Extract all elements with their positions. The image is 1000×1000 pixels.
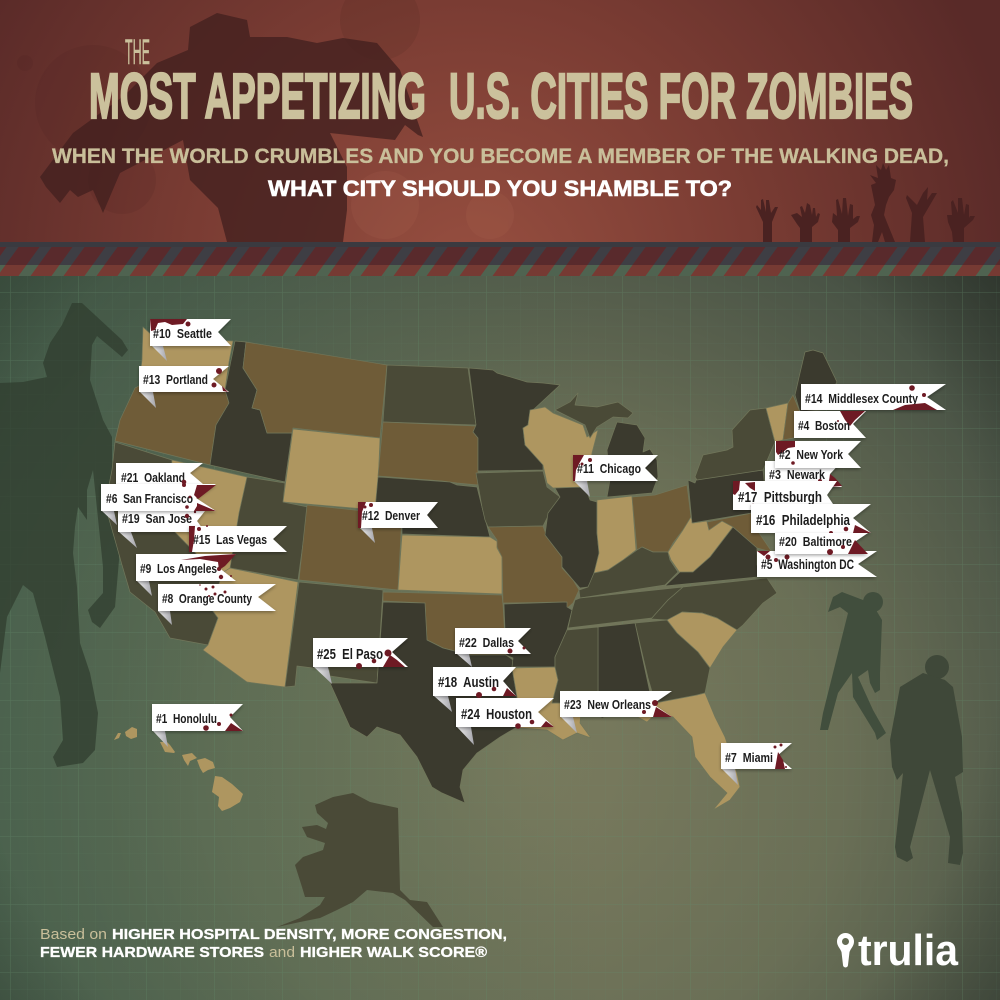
- state: Arizona: [203, 568, 298, 687]
- state: West Virginia: [668, 517, 733, 573]
- header panel: [0, 0, 1000, 242]
- flag: #8 Orange County: [158, 584, 276, 625]
- state: Oregon: [115, 380, 229, 465]
- flag: #19 San Jose: #19 San Jose: [122, 511, 192, 526]
- flag: #17 Pittsburgh: [733, 481, 837, 510]
- state: New Mexico: [285, 582, 383, 687]
- flag: #24 Houston: [456, 698, 554, 745]
- state: North Dakota: [383, 365, 476, 425]
- state: Colorado: [299, 505, 402, 590]
- state: South Dakota: [378, 422, 478, 485]
- map background panel: [0, 242, 1000, 1000]
- state: Mississippi: [552, 627, 598, 715]
- hazard stripe band: [0, 242, 1000, 276]
- flag: #22 Dallas: [455, 628, 531, 667]
- flag: #20 Baltimore: #20 Baltimore: [779, 534, 852, 549]
- flag: #16 Philadelphia: [751, 504, 871, 535]
- flag: #24 Houston: #24 Houston: [461, 707, 532, 723]
- state: Wisconsin: [523, 407, 598, 488]
- flag: #3 Newark: [765, 461, 842, 489]
- flag: #14 Middlesex County: #14 Middlesex County: [805, 391, 919, 406]
- flag: #10 Seattle: #10 Seattle: [153, 326, 212, 341]
- state: Utah: [230, 477, 308, 580]
- state: Louisiana: [512, 667, 591, 740]
- flag: #15 Las Vegas: [189, 525, 287, 552]
- state: Missouri: [488, 526, 579, 610]
- flag: #4 Boston: [794, 411, 866, 438]
- flag: #17 Pittsburgh: #17 Pittsburgh: [738, 490, 822, 506]
- state: Minnesota: [469, 368, 560, 471]
- state: Virginia: [665, 527, 778, 586]
- state: Nevada: [168, 460, 247, 590]
- flag: #21 Oakland: [116, 463, 203, 485]
- state: South Carolina: [667, 612, 737, 668]
- trulia logo: [837, 926, 958, 975]
- state: Kansas: [398, 535, 502, 594]
- flag: #9 Los Angeles: #9 Los Angeles: [140, 561, 217, 576]
- flag: #23 New Orleans: [560, 691, 672, 733]
- flag: #21 Oakland: #21 Oakland: [121, 470, 185, 485]
- US state map: [105, 327, 837, 927]
- zombie hands: header right: [756, 163, 975, 242]
- state: North Carolina: [651, 578, 777, 630]
- state: Montana: [243, 342, 387, 438]
- wordmark: trulia: [858, 926, 958, 975]
- state: Iowa: [476, 471, 560, 527]
- state: Michigan upper: [555, 393, 633, 438]
- state: Alabama: [598, 623, 652, 718]
- flag: #16 Philadelphia: #16 Philadelphia: [756, 513, 851, 529]
- state: Hawaii: [114, 727, 243, 811]
- flag: #6 San Francisco: [101, 483, 216, 525]
- state: Wyoming: [283, 429, 380, 510]
- state: Illinois: [545, 487, 599, 588]
- state: Maryland: [707, 513, 772, 552]
- flag: #20 Baltimore: [775, 533, 868, 555]
- flag: #4 Boston: #4 Boston: [798, 418, 850, 433]
- flag: #25 El Paso: [313, 638, 408, 684]
- flag: #19 San Jose: [118, 511, 205, 548]
- flag: #11 Chicago: [573, 455, 658, 497]
- flag: #15 Las Vegas: #15 Las Vegas: [193, 532, 267, 547]
- flag: #7 Miami: [721, 743, 792, 785]
- flag: #1 Honolulu: [152, 704, 243, 747]
- subtitle line 1: WHEN THE WORLD CRUMBLES AND YOU BECOME A MEMBER OF THE WALKING DEAD,: [52, 145, 949, 168]
- state: New Hampshire: [783, 395, 800, 440]
- zombie silhouette: left: [0, 303, 128, 767]
- state: Georgia: [635, 620, 710, 703]
- flag: #6 San Francisco: #6 San Francisco: [106, 491, 193, 506]
- flag: #18 Austin: [433, 667, 516, 712]
- flag: #5 Washington DC: #5 Washington DC: [761, 557, 854, 572]
- flag: #11 Chicago: #11 Chicago: [577, 461, 641, 476]
- flag: #8 Orange County: #8 Orange County: [162, 591, 253, 606]
- flag: #12 Denver: [358, 502, 438, 543]
- methodology note: and: [269, 944, 295, 961]
- flag: #13 Portland: #13 Portland: [143, 372, 208, 387]
- flag: #1 Honolulu: #1 Honolulu: [156, 711, 217, 726]
- flag: #18 Austin: #18 Austin: [438, 675, 499, 691]
- flag: #2 New York: [775, 441, 861, 468]
- flag: #10 Seattle: [150, 319, 231, 361]
- title: THE: [125, 33, 150, 72]
- state: Texas: [330, 602, 517, 803]
- flag: #5 Washington DC: [757, 551, 877, 577]
- state: Vermont: [766, 403, 788, 442]
- state: California: [105, 442, 223, 645]
- flag: #2 New York: #2 New York: [779, 447, 844, 462]
- state: Alaska: [277, 793, 443, 927]
- state: New Jersey: [755, 470, 777, 515]
- title: most appetizing: MOST APPETIZING: [89, 60, 426, 132]
- state: Kentucky: [579, 547, 678, 598]
- icon: map pin: [837, 933, 854, 968]
- zombie silhouette: header: [40, 13, 423, 242]
- state: Nebraska: [375, 477, 490, 537]
- state: Pennsylvania: [688, 470, 765, 523]
- state: Florida: [612, 693, 740, 810]
- methodology note: HIGHER WALK SCORE®: [300, 944, 487, 961]
- state: Indiana: [594, 496, 636, 573]
- flag: #23 New Orleans: #23 New Orleans: [564, 697, 651, 712]
- flag: #25 El Paso: #25 El Paso: [317, 647, 383, 663]
- state: Tennessee: [568, 587, 683, 628]
- methodology note: Based on: [40, 926, 107, 943]
- state: New York: [695, 408, 775, 480]
- zombie silhouette: middle right: [820, 592, 886, 740]
- state: Maine: [795, 350, 837, 412]
- flag: #7 Miami: #7 Miami: [725, 750, 773, 765]
- flag: #14 Middlesex County: [801, 384, 946, 410]
- state: Washington: [140, 327, 233, 390]
- title: [89, 33, 913, 132]
- methodology note: [40, 926, 507, 961]
- state: Oklahoma: [383, 592, 506, 655]
- flag: #13 Portland: [139, 366, 229, 408]
- flag: #22 Dallas: #22 Dallas: [459, 635, 514, 650]
- subtitle line 2: WHAT CITY SHOULD YOU SHAMBLE TO?: [268, 176, 732, 201]
- methodology note: HIGHER HOSPITAL DENSITY, MORE CONGESTION,: [112, 926, 507, 943]
- flag: #12 Denver: #12 Denver: [362, 508, 420, 523]
- flag: #3 Newark: #3 Newark: [769, 467, 826, 482]
- state: Idaho: [210, 341, 292, 482]
- methodology note: FEWER HARDWARE STORES: [40, 944, 264, 961]
- flag: #9 Los Angeles: [136, 554, 236, 596]
- zombie silhouette: right: [890, 655, 963, 865]
- state: Ohio: [632, 485, 691, 552]
- state: Michigan lower: [607, 422, 658, 497]
- state: Arkansas: [504, 602, 572, 667]
